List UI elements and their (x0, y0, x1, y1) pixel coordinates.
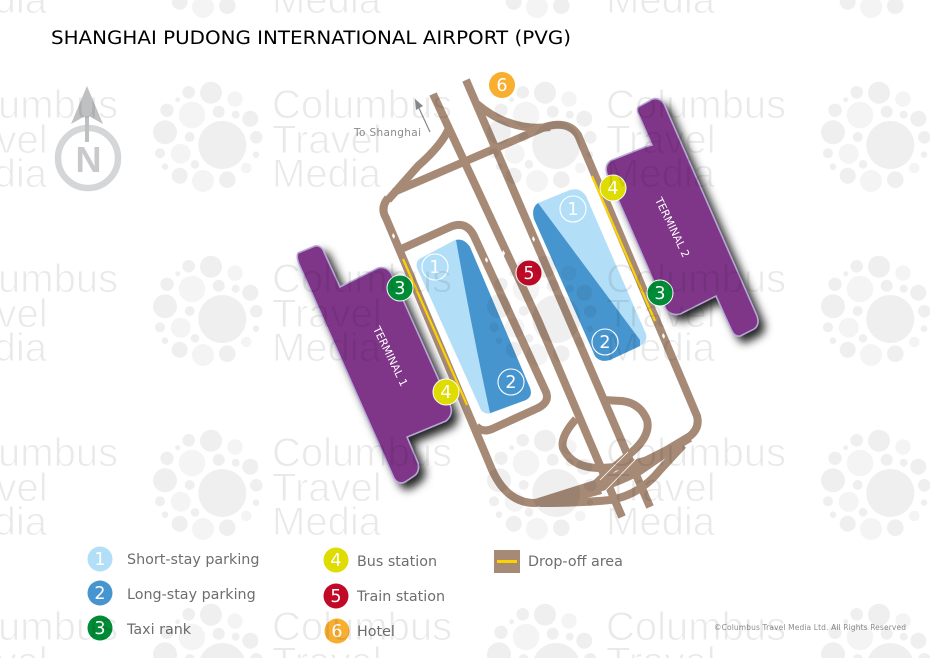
legend: hotel: Hotel (357, 624, 395, 640)
legend: long-stay parking: 2 (94, 584, 106, 604)
legend: taxi rank (88, 616, 192, 640)
marker: 5 train: 5 (523, 264, 535, 284)
marker: 2 east (592, 329, 618, 355)
marker: 3 west: 3 (394, 279, 406, 299)
marker: 4 west: 4 (440, 383, 452, 403)
road: western airport line (433, 94, 622, 517)
legend: hotel (324, 618, 395, 644)
marker: 3 west (387, 275, 413, 301)
road gaps (600, 452, 636, 491)
direction arrows (392, 233, 665, 339)
title: SHANGHAI PUDONG INTERNATIONAL AIRPORT (PVG) (51, 28, 571, 49)
legend: short-stay parking (88, 546, 259, 572)
icon: north compass (58, 86, 118, 188)
road: lower merge lane 2 (570, 450, 672, 497)
marker: 1 west (422, 254, 448, 280)
legend: train station (324, 584, 445, 608)
road: inner loop around car park (399, 225, 547, 430)
legend: bus station: Bus station (357, 554, 437, 570)
legend: bus station (324, 548, 437, 572)
marker: 4 east: 4 (607, 179, 619, 199)
legend: train station: 5 (330, 587, 342, 607)
copyright: ©Columbus Travel Media Ltd. All Rights Reserved (714, 623, 906, 632)
road: lower merge lane (540, 445, 683, 503)
drop-off line east (592, 176, 655, 321)
marker: 5 train (516, 260, 542, 286)
legend: taxi rank: 3 (94, 619, 106, 639)
icon: north compass: N (76, 139, 102, 180)
label: terminal 2: TERMINAL 2 (652, 194, 692, 260)
arrow: to Shanghai (415, 99, 430, 132)
legend: taxi rank: Taxi rank (126, 622, 192, 638)
legend: drop-off area: Drop-off area (528, 554, 623, 570)
legend: drop-off area (494, 550, 623, 573)
road: link to western line (388, 128, 449, 200)
marker: 2 west: 2 (505, 373, 517, 393)
drop-off line west (403, 259, 467, 405)
road: curve from eastern line (477, 104, 550, 128)
road: outer ring (383, 125, 698, 503)
road: lower loop east (585, 400, 648, 494)
marker: 2 west (498, 369, 524, 395)
panel: short-stay and long-stay parking east (533, 189, 646, 361)
marker: 3 east: 3 (654, 284, 666, 304)
marker: 2 east: 2 (599, 333, 611, 353)
marker: 3 east (647, 280, 673, 306)
legend: long-stay parking: Long-stay parking (127, 587, 256, 603)
marker: 6 hotel: 6 (496, 76, 508, 96)
marker: 1 east: 1 (567, 200, 579, 220)
road: lower loop west (563, 419, 690, 468)
road network (383, 80, 698, 517)
road: merge wedges (535, 433, 692, 507)
legend: short-stay parking: 1 (94, 550, 106, 570)
legend (88, 546, 623, 644)
label: to Shanghai: To Shanghai (353, 127, 421, 139)
legend: short-stay parking: Short-stay parking (127, 552, 259, 568)
marker: 4 east (600, 175, 626, 201)
marker: 6 hotel (489, 72, 515, 98)
legend: hotel: 6 (331, 622, 343, 642)
road: eastern airport line (466, 80, 650, 507)
terminal 1 (297, 246, 451, 483)
legend: long-stay parking (88, 580, 256, 606)
marker: 1 east (560, 196, 586, 222)
marker: 4 west (433, 379, 459, 405)
legend: train station: Train station (356, 589, 445, 605)
marker: 1 west: 1 (429, 258, 441, 278)
legend: bus station: 4 (330, 551, 342, 571)
label: terminal 1: TERMINAL 1 (370, 323, 410, 389)
panel: short-stay and long-stay parking west (417, 240, 531, 414)
terminal 2 (606, 99, 758, 336)
